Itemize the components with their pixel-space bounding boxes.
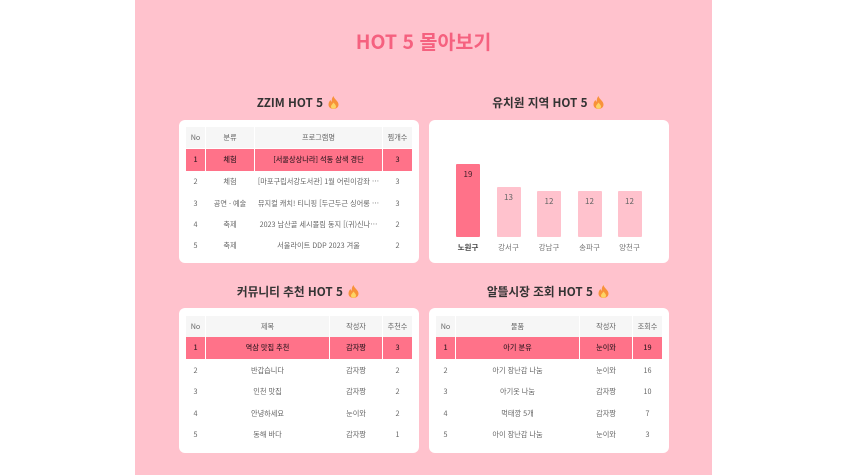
header: No [186,127,205,148]
row 2 count: 2 [396,366,400,376]
highlighted row count [383,337,412,359]
header: 조회수: 조회수 [638,322,657,332]
header: 작성자: 작성자 [596,322,616,332]
panel: market table [429,308,669,453]
header: 찜개수: 찜개수 [388,133,407,143]
highlighted row author [580,337,632,359]
row 3 name: 뮤지컬 캐치! 티니핑 [두근두근 싱어롱 ⋯ [258,198,379,208]
row 4 category: 축제 [223,220,237,230]
header: No: No [191,322,200,332]
row 3 rank: 3 [194,387,198,397]
row 3 author: 감자짱 [346,387,366,397]
highlighted row item [456,337,579,359]
header: No: No [191,133,200,143]
label: 강남구: 강남구 [539,242,559,253]
header: No [186,316,205,337]
row 4 count: 2 [396,408,400,418]
label: 양천구: 양천구 [619,242,640,253]
heading: 유치원 지역 HOT 5: 유치원 지역 HOT 5 [492,94,587,110]
heading: 커뮤니티 추천 HOT 5: 커뮤니티 추천 HOT 5 [237,282,343,300]
pink page background [135,0,712,475]
bar: 송파구 12 [578,191,602,237]
row 2 rank: 2 [194,177,198,187]
row 2 rank: 2 [444,366,448,376]
header: 물품 [456,316,579,337]
header: 찜개수 [383,127,412,148]
highlighted row count [383,149,412,170]
heading: ZZIM HOT 5: ZZIM HOT 5 [257,94,323,110]
row 2 count: 16 [644,366,651,376]
heading: 알뜰시장 조회 HOT 5: 알뜰시장 조회 HOT 5 [487,282,593,300]
row 4 count: 2 [396,220,400,230]
row 4 rank: 4 [194,408,198,418]
highlighted row category [206,149,254,170]
row 3 rank: 3 [194,198,198,208]
row 4 rank: 4 [444,408,448,418]
row 5 count: 1 [396,430,400,440]
panel: community table [179,308,419,453]
label: 노원구: 노원구 [458,242,478,253]
header: 작성자 [330,316,382,337]
row 5 rank: 5 [194,430,198,440]
header: 제목 [206,316,329,337]
highlighted row title: 역삼 맛집 추천 [246,343,289,353]
highlighted row name: [서울상상나라] 석동 삼색 경단 [273,155,364,165]
header: 분류: 분류 [223,133,237,143]
row 2 title: 반갑습니다 [251,366,284,376]
row 5 title: 동해 바다 [253,430,282,440]
row 3 author: 감자짱 [596,387,616,397]
row 5 author: 감자짱 [346,430,366,440]
row 5 rank: 5 [444,430,448,440]
title: HOT 5 몰아보기 [356,26,491,55]
highlighted row author [330,337,382,359]
row 2 author: 눈이와 [596,366,616,376]
row 4 count: 7 [646,408,650,418]
highlighted row author: 감자짱 [346,343,366,353]
row 3 item: 아기옷 나눔 [500,387,535,397]
highlighted row category: 체험 [223,155,237,165]
highlighted row count: 3 [395,343,400,353]
row 4 title: 안녕하세요 [251,408,284,418]
highlighted row count: 19 [643,343,652,353]
row 3 count: 10 [644,387,651,397]
bar: 송파구 12: 12 [585,196,594,207]
row 2 rank: 2 [194,366,198,376]
highlighted row rank [186,149,205,170]
row 2 count: 3 [396,177,400,187]
highlighted row rank [186,337,205,359]
row 4 item: 먹태깡 5개 [501,408,534,418]
row 4 author: 눈이와 [346,408,366,418]
highlighted row author: 눈이와 [596,343,616,353]
row 5 count: 2 [396,241,400,251]
header: 제목: 제목 [261,322,274,332]
bar: 양천구 12: 12 [625,196,634,207]
row 2 author: 감자짱 [346,366,366,376]
label: 강서구: 강서구 [498,242,519,253]
row 3 count: 2 [396,387,400,397]
row 4 name: 2023 남산골 세시몰림 동지 [(귀)신나⋯ [260,220,377,230]
row 3 count: 3 [396,198,400,208]
header: 추천수: 추천수 [388,322,407,332]
header: 프로그램명 [255,127,382,148]
row 4 rank: 4 [194,220,198,230]
highlighted row rank: 1 [193,155,198,165]
header: 분류 [206,127,254,148]
row 5 category: 축제 [223,241,237,251]
header: No: No [441,322,450,332]
bar: 강서구 13: 13 [504,192,513,203]
row 3 rank: 3 [444,387,448,397]
highlighted row count: 3 [395,155,400,165]
header: 조회수 [633,316,662,337]
row 5 rank: 5 [194,241,198,251]
label: 송파구: 송파구 [579,242,600,253]
bar: 강남구 12 [537,191,561,237]
panel: ZZIM table [179,120,419,263]
header: No [436,316,455,337]
row 5 item: 아이 장난감 나눔 [492,430,543,440]
highlighted row rank: 1 [193,343,198,353]
highlighted row title [206,337,329,359]
row 5 author: 눈이와 [596,430,616,440]
bar: 강서구 13 [496,187,520,237]
header: 프로그램명: 프로그램명 [302,133,335,143]
bar: 강남구 12: 12 [545,196,553,207]
header: 물품: 물품 [511,322,524,332]
highlighted row rank [436,337,455,359]
row 3 category: 공연 · 예술 [214,198,246,208]
highlighted row item: 아기 분유 [503,343,532,353]
bar: 노원구 19 [456,164,480,237]
header: 작성자 [580,316,632,337]
row 2 category: 체험 [223,177,237,187]
row 3 title: 인천 맛집 [253,387,282,397]
bar: 양천구 12 [618,191,642,237]
highlighted row name [255,149,382,170]
row 5 name: 서울라이트 DDP 2023 겨울 [277,241,360,251]
row 4 author: 감자짱 [596,408,616,418]
panel: kindergarten region bar chart [429,120,669,263]
header: 추천수 [383,316,412,337]
row 2 item: 아기 장난감 나눔 [492,366,543,376]
bar: 노원구 19: 19 [464,169,472,180]
row 5 count: 3 [646,430,650,440]
row 2 name: [마포구립서강도서관] 1월 어린이강좌 ⋯ [258,177,379,187]
header: 작성자: 작성자 [346,322,366,332]
highlighted row count [633,337,662,359]
highlighted row rank: 1 [443,343,448,353]
